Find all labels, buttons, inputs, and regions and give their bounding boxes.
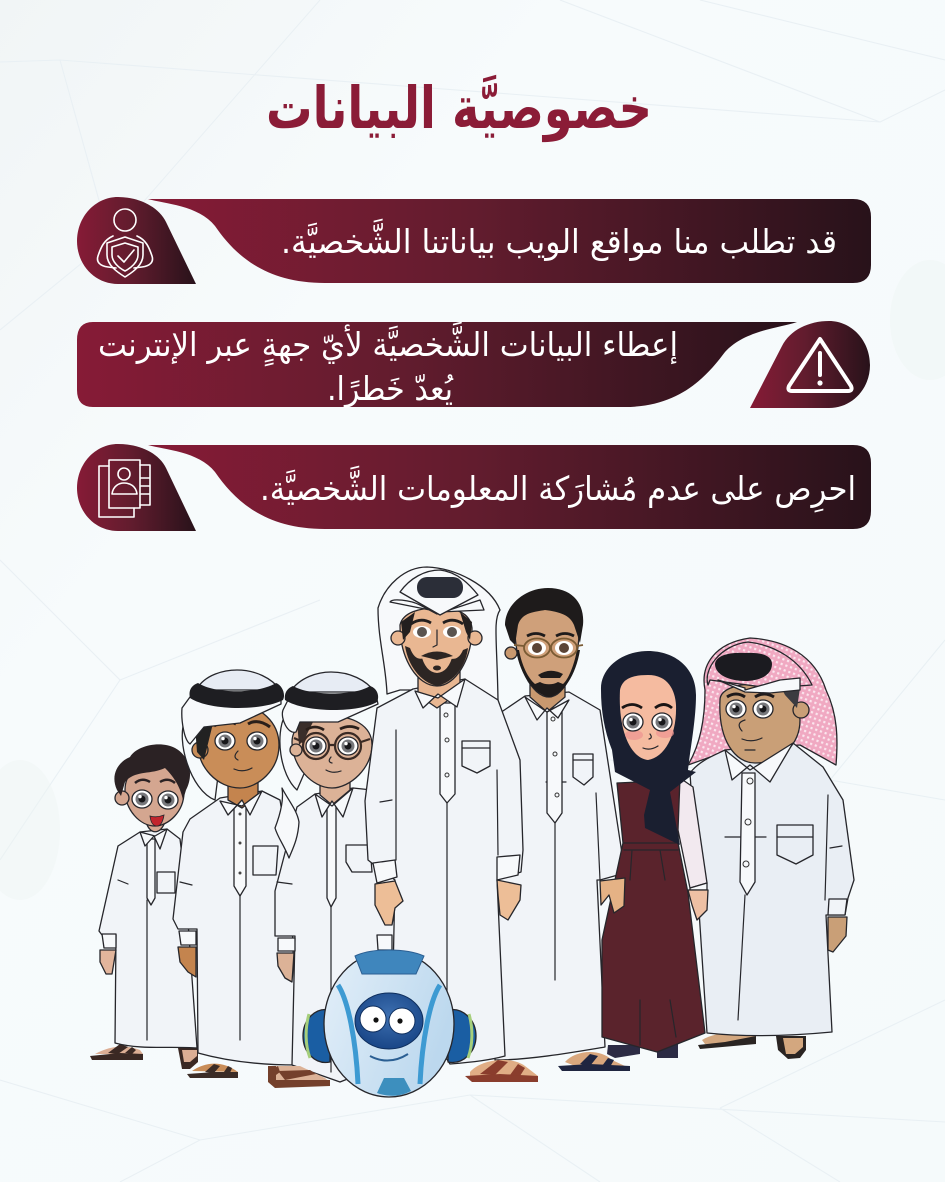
- character: man in pink headscarf: [688, 638, 854, 1059]
- character: girl in hijab and maroon dress: [601, 651, 708, 1058]
- headscarf tail of dark boy: [275, 788, 299, 858]
- robot mascot: [303, 950, 476, 1097]
- character: boy with dark skin: [173, 670, 297, 1078]
- character: boy with glasses: [268, 672, 395, 1088]
- illustration: family group: [90, 567, 854, 1097]
- panel: banner 2: [77, 321, 797, 408]
- text: banner 2 first line: إعطاء البيانات الشَّخصيَّة لأيّ جهةٍ عبر الإنترنت: [98, 321, 678, 366]
- panel: banner 3: [148, 445, 871, 529]
- text: banner 3: احرِص على عدم مُشارَكة المعلومات الشَّخصيَّة.: [260, 465, 856, 513]
- character: man with glasses and goatee: [495, 588, 630, 1071]
- character: small boy: [90, 744, 198, 1069]
- brown sandal: [268, 1066, 330, 1088]
- panel: banner 1: [148, 199, 871, 283]
- text: banner 1: قد تطلب منا مواقع الويب بياناتنا الشَّخصيَّة.: [281, 218, 837, 261]
- icon: person holding shield: [77, 197, 196, 284]
- man's hand on girl's shoulder: [600, 878, 625, 913]
- icon: warning triangle: [750, 321, 870, 408]
- text: banner 2 second line: يُعدّ خَطرًا.: [327, 369, 453, 408]
- title: خصوصيَّة البيانات: [266, 74, 652, 143]
- icon: personal file documents: [77, 444, 196, 531]
- character: tall man with white ghutra: [365, 567, 538, 1082]
